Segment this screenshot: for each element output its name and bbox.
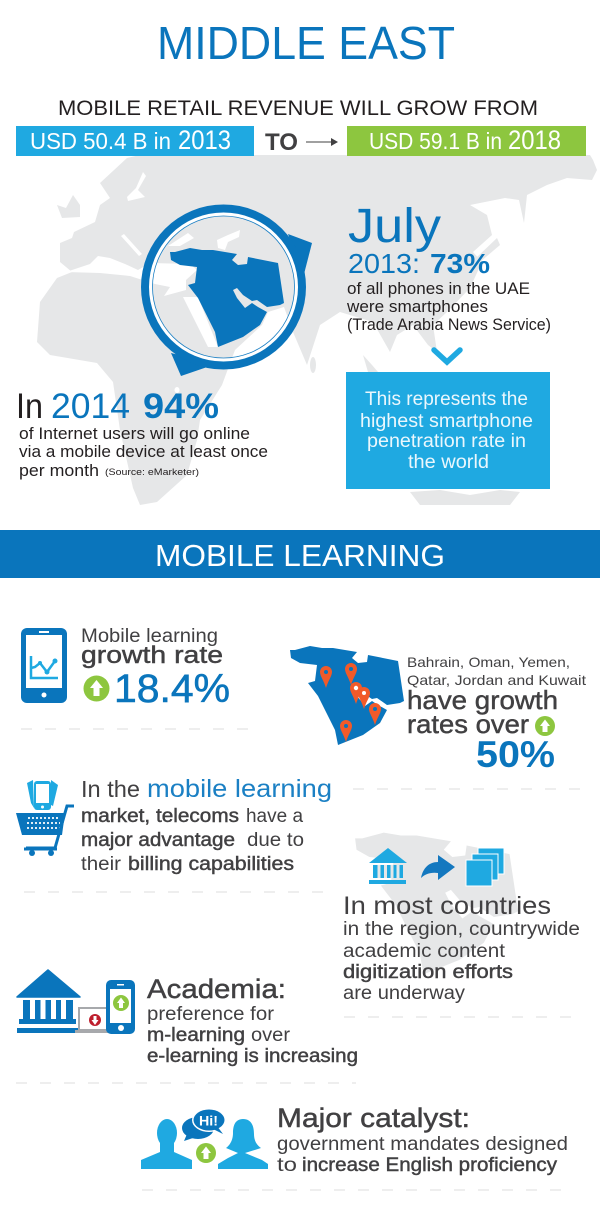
text: telecoms advantage: have a <box>246 806 303 827</box>
stat: July 2013 73%: 2013: <box>348 248 420 279</box>
stat: 2014 94%: 94% <box>143 387 219 426</box>
stat: growth rate 18.4% <box>81 626 230 711</box>
revenue bar: 2018 <box>347 125 586 156</box>
text: digitization: digitization efforts <box>343 962 513 983</box>
stat: 2014 94%: via a mobile device at least once <box>19 442 268 461</box>
text: digitization: in the region, countrywide <box>343 919 580 940</box>
text: telecoms advantage: billing capabilities <box>128 854 294 875</box>
title: MIDDLE EAST <box>157 17 455 69</box>
text: telecoms advantage: In the <box>81 776 140 802</box>
text: academia: m-learning <box>147 1025 245 1046</box>
text: academia: e-learning is increasing <box>147 1046 358 1067</box>
subtitle: MOBILE RETAIL REVENUE WILL GROW FROM <box>58 97 538 120</box>
callout: highest penetration <box>346 372 550 489</box>
section band: mobile learning <box>0 530 600 578</box>
icon: shopping cart with phone <box>16 780 74 856</box>
to label with arrow: TO <box>265 129 298 156</box>
stat: July 2013 73% <box>346 200 551 334</box>
stat: countries over 50%: have growth <box>407 685 558 715</box>
revenue bar: 2018: 2018 <box>508 125 561 155</box>
icon: building <box>369 848 407 884</box>
map magnifier: Middle East highlighted <box>141 204 312 376</box>
text: academia <box>147 974 358 1067</box>
callout: highest penetration: highest smartphone <box>360 411 533 432</box>
stat: 2014 94%: of Internet users will go online <box>19 424 250 443</box>
stat: July 2013 73%: 73% <box>430 248 490 279</box>
text: telecoms advantage: their <box>81 854 122 875</box>
icon: phone with chart <box>21 628 67 703</box>
stat: 2014 94%: In <box>16 387 43 426</box>
icon: curved arrow <box>421 855 455 880</box>
revenue bar: 2013 <box>16 125 254 156</box>
revenue bar: 2013: USD 50.4 B in <box>30 128 171 154</box>
text: digitization: academic content <box>343 941 506 962</box>
text: telecoms advantage: due to <box>247 830 304 851</box>
revenue bar: 2013: 2013 <box>178 125 231 155</box>
text: digitization <box>343 892 580 1004</box>
text: academia: over <box>251 1025 291 1046</box>
callout: highest penetration: This represents the <box>365 389 528 410</box>
callout: highest penetration: the world <box>408 452 489 473</box>
stat: 2014 94% <box>16 387 268 480</box>
world map background <box>37 155 597 505</box>
stat: growth rate 18.4%: growth rate <box>81 642 223 669</box>
icon: people talking: Hi! <box>199 1112 218 1128</box>
text: academia: Academia: <box>147 974 286 1004</box>
callout: highest penetration: penetration rate in <box>367 431 526 452</box>
to label with arrow <box>265 129 338 156</box>
stat: countries over 50%: 50% <box>476 734 555 775</box>
icon: people talking <box>141 1108 268 1169</box>
text: telecoms advantage: mobile learning <box>147 775 332 803</box>
text: telecoms advantage <box>81 775 332 875</box>
stat: growth rate 18.4%: 18.4% <box>114 667 230 711</box>
text: major catalyst: Major catalyst: <box>277 1103 470 1133</box>
stat: July 2013 73%: of all phones in the UAE <box>347 279 530 298</box>
stat: 2014 94%: 2014 <box>51 387 130 426</box>
stat: July 2013 73%: (Trade Arabia News Service) <box>347 315 551 334</box>
stat: 2014 94%: per month <box>19 461 99 480</box>
stat: countries over 50%: rates over <box>407 709 529 739</box>
map: growth pins <box>290 646 404 745</box>
icon: chevron down <box>434 350 460 362</box>
stat: countries over 50%: Qatar, Jordan and Kuwait <box>407 672 586 688</box>
stat: countries over 50% <box>407 654 586 775</box>
text: major catalyst: increase English proficiency <box>302 1155 558 1176</box>
text: major catalyst <box>277 1103 568 1176</box>
text: major catalyst: government mandates designed <box>277 1134 568 1155</box>
stat: July 2013 73%: were smartphones <box>346 297 488 316</box>
map: gray Middle East <box>355 833 518 974</box>
stat: 2014 94%: (Source: eMarketer) <box>105 467 199 477</box>
revenue bar: 2018: USD 59.1 B in <box>369 128 502 154</box>
section band: mobile learning: MOBILE LEARNING <box>155 538 445 573</box>
text: telecoms advantage: market, telecoms <box>81 806 239 827</box>
icon: stacked documents <box>466 848 504 886</box>
text: telecoms advantage: major advantage <box>81 830 235 851</box>
text: major catalyst: to <box>277 1155 297 1176</box>
stat: July 2013 73%: July <box>348 200 441 253</box>
text: academia: preference for <box>147 1004 275 1025</box>
icon: academia building, laptop and phone <box>17 970 135 1034</box>
stat: countries over 50%: Bahrain, Oman, Yemen, <box>407 654 570 670</box>
text: digitization: are underway <box>343 983 466 1004</box>
stat: growth rate 18.4%: Mobile learning <box>81 626 218 647</box>
text: digitization: In most countries <box>343 892 551 920</box>
